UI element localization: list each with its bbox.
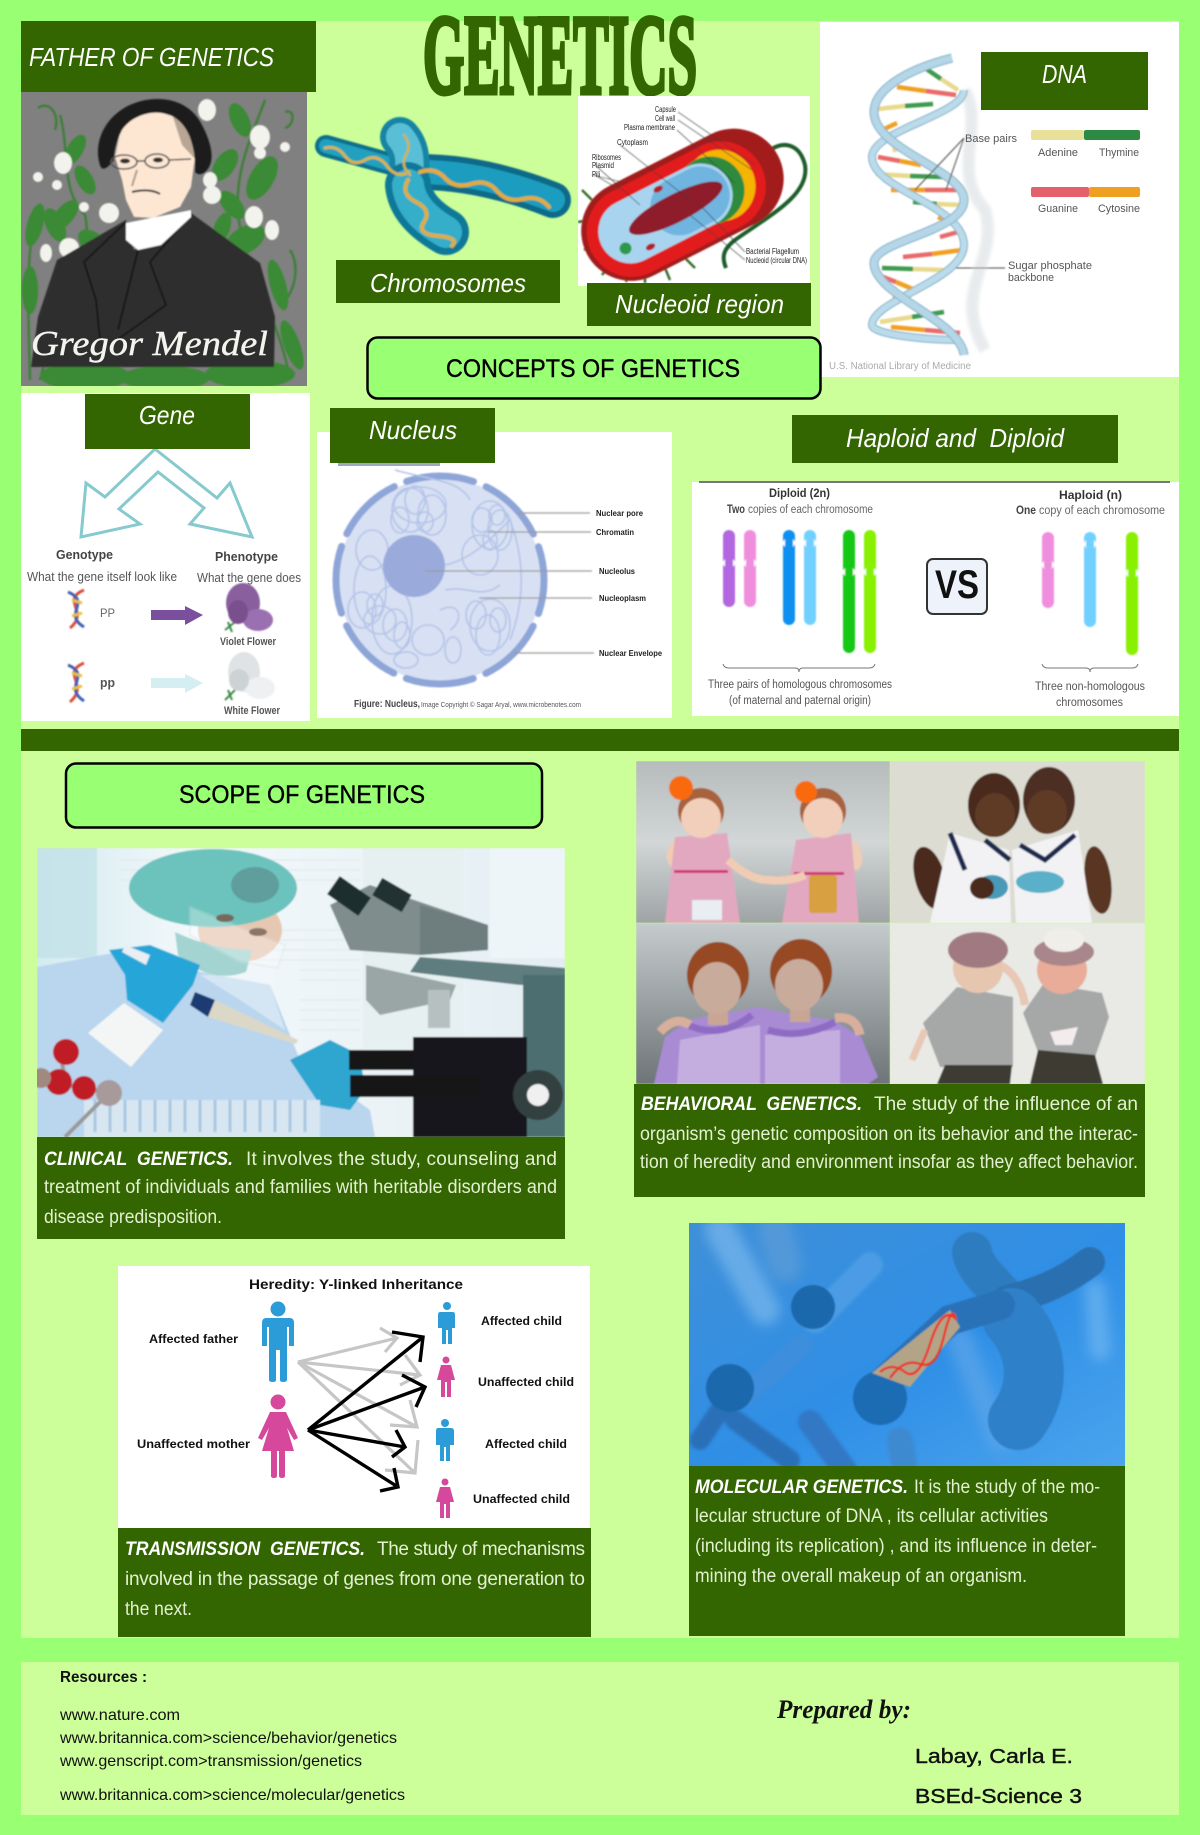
photo: twins collage (636, 761, 1145, 1084)
DNA legend (829, 130, 1140, 372)
footer background panel (21, 1662, 1179, 1815)
nucleus labels: Nucleoplasm (599, 594, 646, 603)
icon: child 1 (438, 1302, 455, 1344)
prepared by credit: Labay, Carla E. (915, 1746, 1073, 1768)
braces and captions: chromosomes (1056, 697, 1123, 709)
chart title: Heredity: Y-linked Inheritance (249, 1276, 463, 1292)
text block: behavioral genetics: BEHAVIORAL GENETICS. (641, 1094, 862, 1115)
icon: violet flower (225, 583, 273, 632)
panel: DNA double helix (820, 22, 1179, 377)
label: chromosomes (336, 260, 560, 303)
twins: babies in hats (890, 923, 1145, 1084)
bacterial cell labels: Cytoplasm (617, 138, 648, 147)
label: haploid and diploid: Haploid and Diploid (846, 423, 1065, 453)
resources list: www.britannica.com>science/behavior/genetics (59, 1730, 397, 1747)
resources list: www.genscript.com>transmission/genetics (59, 1753, 362, 1770)
nucleus labels: Nucleolus (599, 567, 636, 576)
resources list: www.nature.com (59, 1707, 180, 1724)
nucleus labels (354, 509, 663, 710)
resources list: Resources : (60, 1669, 147, 1686)
genotype and phenotype text (27, 547, 301, 717)
prepared by credit: Prepared by: (776, 1695, 911, 1724)
diploid heading: Diploid (2n) (769, 486, 830, 500)
bacterial cell labels (592, 105, 807, 265)
portrait name: Gregor Mendel (31, 324, 268, 363)
label: nucleoid region: Nucleoid region (615, 289, 784, 319)
bacterial cell labels: Nucleoid (circular DNA) (746, 256, 807, 265)
label: nucleus: Nucleus (369, 415, 457, 445)
portrait: Gregor Mendel (21, 92, 308, 390)
bacterial cell labels: Capsule (655, 105, 676, 114)
diploid heading (727, 486, 873, 516)
prepared by credit: BSEd-Science 3 (915, 1786, 1082, 1808)
text block: molecular genetics: mining the overall makeup of an organism. (695, 1566, 1027, 1587)
bacterial cell labels: Ribosomes (592, 153, 621, 162)
nucleus labels: Chromatin (596, 528, 634, 537)
DNA legend: Adenine (1038, 147, 1078, 159)
text block: clinical genetics (37, 1137, 565, 1239)
text block: molecular genetics (689, 1466, 1125, 1636)
text block: clinical genetics: disease predisposition. (44, 1207, 222, 1228)
text block: molecular genetics: lecular structure of DNA , its cellular activities (695, 1506, 1048, 1527)
panel: haploid versus diploid (692, 481, 1179, 716)
DNA legend: backbone (1008, 272, 1054, 284)
heading: scope of genetics: SCOPE OF GENETICS (179, 781, 425, 809)
icon: helix pp (68, 663, 84, 702)
twins: boys in white vests (890, 761, 1145, 923)
haploid chromosomes (1041, 532, 1139, 655)
nucleus labels: Nuclear pore (596, 509, 644, 518)
DNA base pair rungs (876, 68, 962, 333)
label: haploid and diploid (792, 415, 1118, 463)
chart labels: Unaffected child (478, 1377, 574, 1389)
haploid heading (1016, 488, 1165, 517)
resources list (59, 1669, 405, 1804)
illustration: chromosome (325, 135, 553, 246)
genotype and phenotype text: What the gene itself look like (27, 569, 177, 584)
VS badge: VS (935, 563, 979, 607)
bacterial cell labels: Pili (592, 170, 600, 179)
label: chromosomes: Chromosomes (370, 268, 526, 298)
text block: behavioral genetics: organism’s genetic composition on its behavior and the interac- (640, 1124, 1138, 1145)
text block: molecular genetics: MOLECULAR GENETICS. (695, 1477, 908, 1498)
bacterial cell labels: Cell wall (655, 114, 675, 123)
bacterial cell labels: Plasmid (592, 161, 614, 170)
heading: concepts of genetics: CONCEPTS OF GENETICS (446, 355, 740, 383)
twins: toddler girls in pink (636, 761, 890, 923)
panel: nucleus (308, 432, 672, 718)
photo: molecular chromosomes (689, 1223, 1125, 1470)
genotype and phenotype text: White Flower (224, 705, 281, 717)
chart labels: Affected father (149, 1334, 239, 1346)
nucleus labels: Image Copyright © Sagar Aryal, www.microbenotes.com (421, 701, 581, 709)
text block: behavioral genetics: The study of the influence of an (874, 1094, 1138, 1115)
heading: scope of genetics (66, 764, 542, 828)
chart labels: Affected child (485, 1439, 567, 1451)
label: father of genetics (21, 21, 316, 92)
label: DNA (981, 52, 1148, 110)
braces and captions: Three non-homologous (1035, 681, 1145, 693)
divider band (21, 729, 1179, 751)
label: gene (85, 394, 250, 449)
text block: transmission genetics: TRANSMISSION GENETICS. (125, 1539, 365, 1560)
icon: father (262, 1302, 294, 1382)
nucleus labels: Figure: Nucleus, (354, 699, 420, 710)
text block: transmission genetics: involved in the passage of genes from one generation to (125, 1569, 585, 1590)
icon: child 2 (437, 1356, 455, 1397)
genotype and phenotype text: Genotype (56, 547, 113, 562)
diploid heading: copies of each chromosome (748, 504, 873, 516)
arrow: violet (151, 606, 203, 625)
icon: forked arrows (81, 449, 252, 537)
label: gene: Gene (139, 400, 195, 430)
nucleus diagram (308, 448, 594, 712)
braces and captions: Three pairs of homologous chromosomes (708, 679, 892, 691)
text block: clinical genetics: CLINICAL GENETICS. (44, 1149, 233, 1170)
twins: red-haired girls in purple (636, 923, 890, 1084)
text block: molecular genetics: It is the study of the mo- (914, 1477, 1100, 1498)
genotype and phenotype text: pp (100, 675, 115, 690)
genotype and phenotype text: Phenotype (215, 549, 278, 564)
icon: child 3 (436, 1419, 454, 1461)
icon: white flower (225, 652, 275, 700)
DNA legend: Guanine (1038, 203, 1078, 215)
bacterial cell labels: Plasma membrane (624, 123, 675, 132)
panel: gene (21, 393, 310, 721)
braces and captions (708, 664, 1145, 709)
DNA legend: Base pairs (965, 133, 1017, 145)
text block: molecular genetics: (including its replication) , and its influence in deter- (695, 1536, 1097, 1557)
text block: transmission genetics (118, 1528, 591, 1637)
arrows: from father (298, 1328, 420, 1473)
arrow: pale (151, 674, 203, 693)
text block: transmission genetics: the next. (125, 1599, 192, 1620)
genotype and phenotype text: What the gene does (197, 570, 301, 585)
resources list: www.britannica.com>science/molecular/genetics (59, 1787, 405, 1804)
nucleus labels: Nuclear Envelope (599, 649, 663, 658)
diploid chromosomes (722, 530, 877, 653)
icon: helix PP (68, 590, 84, 628)
DNA sugar phosphate ribbons (872, 58, 964, 355)
label: DNA: DNA (1042, 59, 1087, 89)
diploid heading: Two (727, 504, 745, 516)
photo: clinical genetics lab (31, 848, 565, 1137)
chart labels (137, 1316, 574, 1506)
icon: mother (258, 1394, 298, 1478)
genotype and phenotype text: PP (100, 606, 115, 620)
prepared by credit (776, 1695, 1082, 1808)
chart labels: Affected child (481, 1316, 562, 1328)
text block: behavioral genetics: tion of heredity and environment insofar as they affect behavior. (640, 1152, 1138, 1173)
haploid heading: copy of each chromosome (1039, 505, 1165, 517)
DNA legend: Cytosine (1098, 203, 1140, 215)
VS badge (927, 559, 987, 614)
bacterial cell labels: Bacterial Flagellum (746, 247, 799, 256)
text block: transmission genetics: The study of mechanisms (377, 1539, 585, 1560)
label: father of genetics: FATHER OF GENETICS (29, 42, 275, 72)
genotype and phenotype text: Violet Flower (220, 636, 277, 648)
icon: child 4 (436, 1478, 454, 1518)
chart labels: Unaffected child (473, 1494, 570, 1506)
label: nucleus (330, 408, 495, 463)
DNA legend: Thymine (1099, 147, 1139, 159)
label: nucleoid region (587, 283, 811, 326)
illustration: bacterial cell with nucleoid (578, 96, 810, 286)
text block: clinical genetics: treatment of individuals and families with heritable disorders and (44, 1177, 557, 1198)
heading: concepts of genetics (368, 338, 820, 398)
braces and captions: (of maternal and paternal origin) (729, 695, 871, 707)
text block: clinical genetics: It involves the study, counseling and (246, 1149, 557, 1170)
haploid heading: Haploid (n) (1059, 488, 1122, 502)
DNA legend: U.S. National Library of Medicine (829, 361, 971, 372)
arrows: from mother (308, 1332, 425, 1491)
haploid heading: One (1016, 505, 1036, 517)
text block: behavioral genetics (634, 1084, 1145, 1197)
panel: Y-linked inheritance chart (118, 1266, 590, 1528)
chart labels: Unaffected mother (137, 1439, 251, 1451)
DNA legend: Sugar phosphate (1008, 260, 1092, 272)
